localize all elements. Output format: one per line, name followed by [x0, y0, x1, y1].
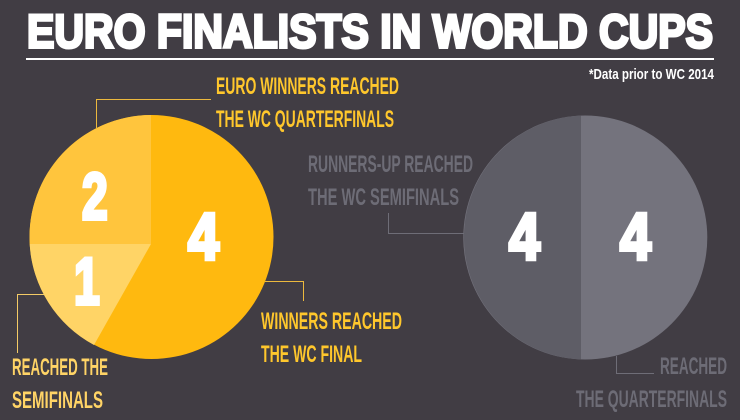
- label: runners-up reached the WC semifinals: RUNNERS-UP REACHED: [308, 151, 473, 178]
- slice: reached the semifinals: [30, 244, 151, 345]
- pie chart: Euro winners: [29, 115, 273, 359]
- value: 2: 2: [82, 159, 108, 233]
- label: reached the semifinals: REACHED THE: [12, 354, 108, 381]
- value: 4: 4: [188, 199, 219, 273]
- leader: runners-up quarterfinals: [616, 356, 654, 374]
- leader: final: [265, 282, 304, 301]
- label: Euro winners reached the WC quarterfinals: EURO WINNERS REACHED: [216, 73, 399, 100]
- label: runners-up reached the WC semifinals: THE WC SEMIFINALS: [308, 184, 459, 211]
- label: winners reached the WC final: WINNERS REACHED: [261, 308, 402, 335]
- slice: reached the WC semifinals: [464, 116, 581, 359]
- leader: runners-up semifinals: [388, 213, 464, 234]
- slice: reached the quarterfinals: [463, 116, 707, 360]
- label: Euro winners reached the WC quarterfinals: THE WC QUARTERFINALS: [216, 106, 394, 133]
- value: 4 right: 4: [620, 199, 651, 273]
- value: 1: 1: [74, 244, 100, 318]
- title rule: [26, 58, 714, 60]
- leader: semifinals: [18, 294, 44, 353]
- label: reached the semifinals: [12, 354, 108, 414]
- label: Euro winners reached the WC quarterfinals: [216, 73, 399, 133]
- label: winners reached the WC final: [261, 308, 402, 368]
- pie chart: Euro runners-up: [463, 116, 707, 360]
- slice: reached the WC final: [30, 115, 274, 359]
- label: reached the semifinals: SEMIFINALS: [12, 387, 103, 414]
- slice: reached the WC quarterfinals: [29, 115, 151, 244]
- label: reached the quarterfinals: [576, 353, 727, 413]
- leader: quarterfinals: [96, 100, 211, 129]
- value: 4 left: 4: [509, 199, 540, 273]
- label: winners reached the WC final: THE WC FINAL: [261, 341, 362, 368]
- label: runners-up reached the WC semifinals: [308, 151, 473, 211]
